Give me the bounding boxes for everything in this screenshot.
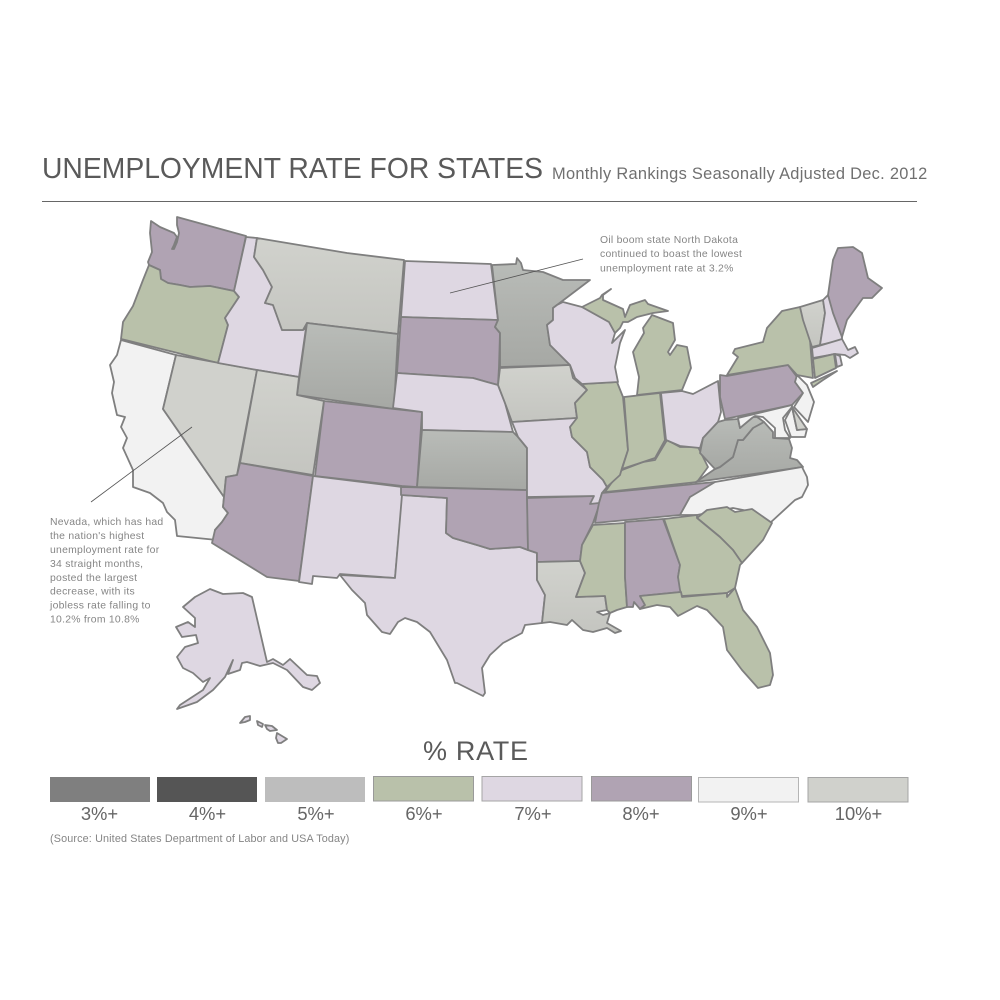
state: Connecticut	[813, 354, 836, 378]
state: Wisconsin	[547, 302, 625, 384]
state: Kentucky	[605, 440, 708, 492]
legend item: 7%+	[482, 776, 582, 824]
legend item: 10%+	[808, 778, 908, 824]
state: Delaware	[792, 407, 807, 430]
legend item: 8%+: 8%+	[622, 803, 660, 824]
state: New York	[727, 307, 813, 378]
state: California	[110, 340, 228, 540]
legend item: 6%+: 6%+	[405, 803, 443, 824]
state: West Virginia	[700, 417, 764, 469]
legend item: 3%+: 3%+	[81, 803, 118, 824]
state: New Hampshire	[820, 295, 842, 345]
map of the United States	[110, 217, 882, 743]
state: Utah	[240, 370, 324, 475]
state: Nebraska	[393, 373, 513, 432]
state: Texas	[340, 495, 545, 696]
callout: Nevada: jobless rate falling to	[49, 600, 151, 612]
state: Tennessee	[595, 482, 715, 523]
callout: Nevada	[49, 427, 192, 626]
state: Oregon	[121, 265, 239, 363]
state: Illinois	[570, 382, 628, 487]
state: Virginia	[696, 417, 803, 482]
state: Maryland eastern shore	[785, 407, 807, 437]
state: Rhode Island	[835, 354, 842, 367]
legend item: 4%+: 4%+	[189, 803, 226, 824]
state: Florida	[640, 588, 773, 688]
legend	[50, 776, 908, 824]
state: Missouri	[512, 418, 607, 504]
legend item: 9%+	[698, 778, 798, 824]
legend item: 6%+	[374, 776, 474, 824]
legend item: 9%+: 9%+	[730, 803, 768, 824]
state: Maine	[828, 247, 882, 337]
legend item: 5%+: 5%+	[297, 803, 335, 824]
state: Nevada	[163, 355, 257, 497]
state: Montana	[254, 238, 404, 334]
title: UNEMPLOYMENT RATE FOR STATES	[42, 152, 543, 184]
state: Mississippi	[576, 523, 627, 613]
state: Louisiana	[537, 561, 621, 633]
state: Arizona	[212, 463, 313, 581]
state: Alaska	[176, 589, 320, 709]
state: Minnesota	[492, 258, 590, 367]
callout: Nevada: decrease, with its	[50, 586, 135, 598]
callout: North Dakota: Oil boom state North Dakota	[600, 235, 738, 246]
callout: Nevada: the nation's highest	[50, 531, 144, 542]
callout: Nevada: Nevada, which has had	[50, 517, 163, 528]
state: South Dakota	[397, 317, 500, 385]
state: Ohio	[661, 381, 721, 448]
state: Long Island	[811, 371, 837, 387]
source note: (Source: United States Department of Labor and USA Today)	[50, 833, 349, 845]
state: Indiana	[622, 393, 665, 469]
legend item: 7%+: 7%+	[514, 803, 552, 824]
legend heading: % RATE	[423, 736, 529, 766]
callout: Nevada: 10.2% from 10.8%	[50, 614, 140, 626]
state: South Carolina	[697, 507, 772, 563]
state: New Mexico	[299, 476, 402, 584]
subtitle: Monthly Rankings Seasonally Adjusted Dec. 2012	[552, 165, 928, 183]
callout: North Dakota: continued to boast the lowest	[600, 249, 742, 260]
state: Idaho	[218, 237, 306, 377]
legend item: 8%+	[592, 776, 692, 824]
state: Iowa	[498, 365, 587, 422]
state: Arkansas	[527, 496, 600, 562]
callout: Nevada: unemployment rate for	[50, 545, 160, 556]
state: Massachusetts	[812, 339, 858, 358]
state: Wyoming	[297, 323, 398, 409]
callout: North Dakota	[450, 235, 742, 293]
state: Vermont	[800, 300, 825, 347]
state: Washington	[148, 217, 246, 291]
state: Michigan lower peninsula	[633, 315, 691, 395]
state: North Dakota	[401, 261, 498, 320]
state: New Jersey	[794, 375, 814, 422]
state: Kansas	[417, 430, 527, 490]
state: Oklahoma	[401, 487, 528, 550]
state: Hawaii	[240, 716, 287, 743]
legend item: 3%+	[50, 777, 150, 824]
legend item: 4%+	[157, 777, 257, 824]
state: Maryland	[738, 405, 792, 438]
state: Michigan upper peninsula	[582, 289, 668, 333]
state: Pennsylvania	[720, 365, 803, 419]
callout: North Dakota: unemployment rate at 3.2%	[600, 264, 734, 274]
callout: Nevada: 34 straight months,	[50, 559, 143, 570]
callout: Nevada: posted the largest	[50, 573, 137, 584]
state: Colorado	[315, 401, 422, 487]
state: North Carolina	[680, 467, 808, 523]
legend item: 10%+: 10%+	[835, 803, 882, 824]
state: Alabama	[625, 519, 681, 609]
state: Georgia	[664, 515, 742, 596]
legend item: 5%+	[265, 777, 365, 824]
